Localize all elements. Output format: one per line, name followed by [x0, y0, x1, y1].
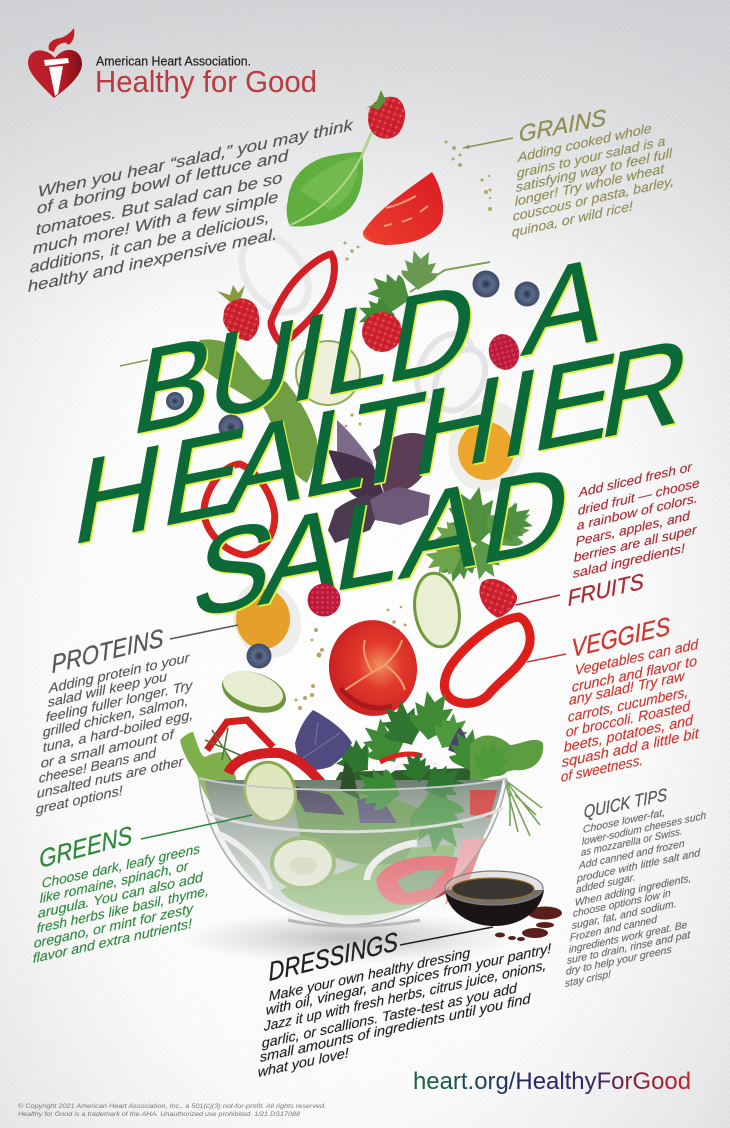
- title shadow: SALAD: [185, 440, 582, 646]
- body: or broccoli. Roasted: [566, 697, 691, 740]
- body: sure to drain, rinse and pat: [567, 930, 692, 967]
- body: Add canned and frozen: [578, 838, 685, 872]
- body: a rainbow of colors.: [576, 491, 698, 533]
- body: unsalted nuts are other: [36, 753, 184, 801]
- body: crunch and flavor to: [572, 652, 697, 695]
- intro text block: When you hear “salad,” you may think: [38, 117, 355, 201]
- body: small amounts of ingredients until you find: [260, 991, 531, 1065]
- icon: blueberries left: [166, 392, 244, 440]
- website url: heart.org/HealthyForGood: [413, 1068, 691, 1095]
- heading: GREENS: [38, 821, 133, 874]
- icon: blueberry lower: [246, 644, 272, 668]
- icon: raspberry right: [485, 331, 523, 373]
- body: [32, 841, 209, 966]
- heading: PROTEINS: [51, 624, 164, 679]
- title: Build a Healthier Salad: [64, 229, 701, 646]
- title lettering: HEALTHIER: [64, 311, 699, 571]
- body: [35, 650, 194, 817]
- body: satisfying way to feel full: [515, 145, 674, 195]
- icon: tomato slice: [323, 614, 423, 722]
- icon: boiled egg lower: [221, 571, 313, 669]
- icon: cucumber slice: [296, 341, 360, 405]
- copyright footer: © Copyright 2021 American Heart Association, Inc., a 501(c)(3) not-for-profit. All rights reserved.: [18, 1102, 326, 1110]
- title shadow: HEALTHIER: [66, 312, 701, 573]
- heading: GRAINS: [519, 104, 607, 147]
- icon: heart and torch: [28, 28, 82, 98]
- body: fresh herbs like basil, thyme,: [36, 883, 209, 936]
- callout: proteins: [35, 624, 238, 817]
- heading: VEGGIES: [571, 612, 671, 663]
- icon: tomato wedge: [363, 172, 443, 245]
- body: salad ingredients!: [572, 541, 686, 581]
- title shadow: [66, 231, 701, 646]
- body: beets, potatoes, and: [564, 711, 694, 755]
- title shadow: BUILD A: [125, 231, 619, 463]
- body: Choose lower-fat,: [583, 807, 665, 836]
- bowl shadow: [180, 912, 520, 964]
- body: or a small amount of: [40, 726, 175, 771]
- body: Vegetables can add: [575, 635, 699, 678]
- callout: quick tips: [565, 784, 707, 990]
- body: added sugar.: [576, 872, 636, 896]
- body: [565, 807, 707, 990]
- icon: top strawberry: [359, 90, 405, 162]
- leader line: [527, 654, 566, 662]
- logo: American Heart Association Healthy for Good: [28, 28, 317, 99]
- body: grains to your salad is a: [516, 133, 666, 181]
- callout: fruits: [516, 460, 700, 611]
- body: with oil, vinegar, and spices from your pantry!: [266, 941, 552, 1018]
- body: [258, 941, 552, 1080]
- body: dry to help your greens: [566, 944, 672, 978]
- intro text block: healthy and inexpensive meal.: [28, 226, 278, 296]
- icon: cilantro sprig: [359, 250, 490, 332]
- icon: purple basil: [328, 420, 430, 543]
- leader line: [170, 625, 238, 639]
- heading: DRESSINGS: [268, 926, 399, 987]
- body: When adding ingredients,: [575, 873, 692, 909]
- icon: parsley: [424, 484, 540, 588]
- body: Frozen and canned: [570, 914, 657, 944]
- salad above the rim: [180, 689, 543, 836]
- body: what you love!: [258, 1045, 349, 1080]
- icon: red berry centre: [362, 312, 402, 352]
- body: as mozzarella or Swiss.: [581, 826, 683, 859]
- body: choose options low in: [573, 888, 671, 920]
- icon: strawberry left: [217, 285, 259, 341]
- title lettering: BUILD A: [123, 229, 617, 461]
- body: great options!: [35, 783, 123, 817]
- food: falling ingredients behind the title: [120, 90, 540, 722]
- leader line: [516, 595, 560, 605]
- title lettering: [64, 229, 699, 644]
- body: longer! Try whole wheat: [514, 160, 666, 209]
- intro text block: additions, it can be a delicious,: [30, 209, 270, 277]
- body: salad will keep you: [47, 668, 168, 710]
- body: couscous or pasta, barley,: [512, 173, 674, 224]
- body: garlic, or scallions. Taste-test as you add: [262, 980, 518, 1051]
- body: Pears, apples, and: [575, 508, 691, 549]
- body: [572, 460, 700, 581]
- body: tuna, a hard-boiled egg,: [42, 707, 193, 755]
- body: lower-sodium cheeses such: [582, 810, 707, 848]
- organisation name: American Heart Association.: [96, 54, 251, 68]
- callout: greens: [32, 815, 252, 966]
- intro text block: of a boring bowl of lettuce and: [37, 147, 290, 218]
- icon: red pepper ring top: [271, 254, 334, 345]
- icon: grain specks: [294, 140, 492, 710]
- body: dried fruit — choose: [577, 476, 700, 518]
- body: arugula. You can also add: [37, 869, 204, 921]
- body: stay crisp!: [565, 969, 611, 990]
- body: quinoa, or wild rice!: [511, 198, 634, 240]
- copyright footer: [18, 1102, 326, 1118]
- body: any salad! Try raw: [569, 667, 685, 708]
- body: grilled chicken, salmon,: [42, 693, 189, 740]
- body: flavor and extra nutrients!: [32, 916, 193, 966]
- callout: dressings: [258, 926, 552, 1080]
- heading: QUICK TIPS: [583, 784, 667, 822]
- icon: romaine leaf: [197, 339, 317, 483]
- body: squash add a little bit: [562, 725, 700, 770]
- brand name: Healthy for Good: [95, 64, 317, 99]
- body: [511, 120, 674, 240]
- icon: cucumber slice left: [217, 664, 291, 720]
- heading: FRUITS: [567, 568, 644, 611]
- body: berries are all super: [573, 522, 698, 565]
- body: [561, 635, 700, 785]
- dressing dish: [445, 871, 562, 941]
- callout: veggies: [527, 612, 700, 785]
- icon: basil leaf: [287, 132, 372, 226]
- glass bowl: [199, 779, 507, 925]
- icon: red pepper ring left: [204, 464, 275, 555]
- icon: onion ring top: [228, 224, 322, 324]
- dressing spill: [495, 906, 562, 941]
- dish: [445, 890, 544, 926]
- icon: blueberries upper: [472, 270, 540, 306]
- salad in the bowl: [205, 749, 503, 922]
- icon: onion rings centre: [406, 324, 496, 420]
- callout: grains: [463, 104, 674, 240]
- body: of sweetness.: [561, 751, 643, 785]
- body: oregano, or mint for zesty: [33, 900, 195, 951]
- body: feeling fuller longer. Try: [45, 677, 194, 725]
- body: sugar, fat, and sodium.: [572, 899, 677, 932]
- body: Adding cooked whole: [516, 120, 652, 165]
- salad bowl: [180, 689, 543, 964]
- body: ingredients work great. Be: [569, 920, 688, 956]
- leader line: [141, 815, 252, 839]
- body: produce with little salt and: [576, 848, 701, 885]
- body: Make your own healthy dressing: [269, 945, 471, 1004]
- body: Add sliced fresh or: [577, 460, 693, 500]
- leader line: [463, 138, 513, 148]
- icon: boiled egg upper: [438, 392, 536, 500]
- icon: strawberry right: [479, 579, 517, 618]
- body: Jazz it up with fresh herbs, citrus juice, onions,: [263, 957, 546, 1034]
- icon: raspberry lower: [308, 584, 340, 616]
- intro text block: [28, 117, 355, 296]
- icon: cucumber piece: [410, 570, 464, 650]
- copyright footer: Healthy for Good is a trademark of the AHA. Unauthorized use prohibited. 1/21 DS17088: [18, 1111, 300, 1118]
- body: cheese! Beans and: [38, 745, 157, 786]
- icon: red pepper ring right: [444, 617, 530, 703]
- intro text block: much more! With a few simple: [33, 189, 279, 258]
- body: like romaine, spinach, or: [39, 858, 189, 906]
- leader line: [400, 927, 493, 945]
- body: Choose dark, leafy greens: [41, 841, 201, 891]
- title lettering: SALAD: [183, 438, 580, 644]
- body: carrots, cucumbers,: [568, 683, 688, 725]
- body: Adding protein to your: [47, 650, 190, 696]
- intro text block: tomatoes. But salad can be so: [36, 169, 283, 239]
